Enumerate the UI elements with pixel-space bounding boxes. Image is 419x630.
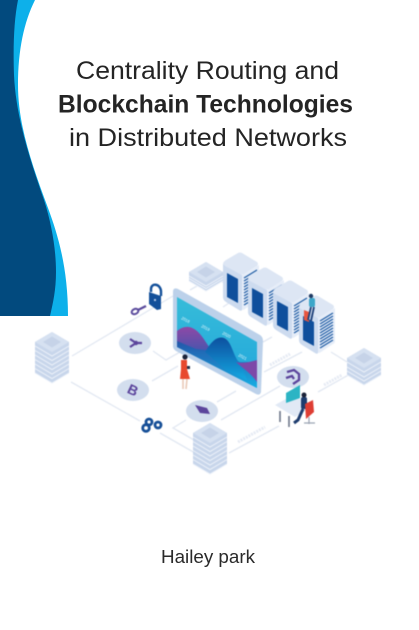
chart labels: 2021 <box>238 352 248 361</box>
connector captions <box>238 354 342 442</box>
monitor <box>173 288 263 395</box>
person on server <box>304 294 315 322</box>
wave: light blue band <box>0 0 68 316</box>
person: woman in red dress <box>180 354 190 389</box>
chart labels <box>181 315 248 361</box>
coin: ethereum <box>186 400 218 422</box>
chart labels: 2019 <box>201 323 211 332</box>
coin: bitcoin <box>117 379 149 401</box>
chart labels: 2020 <box>222 330 232 339</box>
network illustration <box>35 252 381 474</box>
chart labels: 2018 <box>181 315 191 324</box>
title <box>58 57 353 152</box>
desk with person <box>275 385 315 427</box>
wave: dark navy shape <box>0 0 56 316</box>
coin: dash <box>277 366 309 388</box>
coin: bitcoin: B <box>125 381 141 399</box>
author: Hailey park <box>161 546 256 567</box>
icon: key <box>131 306 146 315</box>
connector lines <box>71 279 352 453</box>
title: Centrality Routing and <box>76 57 339 85</box>
server stack: right <box>347 348 381 385</box>
icon: padlock <box>149 285 161 310</box>
server stack: left <box>35 332 69 383</box>
coin: ripple <box>119 332 151 354</box>
chart waves <box>177 333 257 388</box>
title: Blockchain Technologies <box>58 90 353 118</box>
server towers <box>223 252 335 354</box>
title: in Distributed Networks <box>69 124 347 152</box>
icon: gears <box>143 419 161 431</box>
server stack: top small <box>189 262 223 291</box>
server stack: bottom <box>193 423 227 474</box>
